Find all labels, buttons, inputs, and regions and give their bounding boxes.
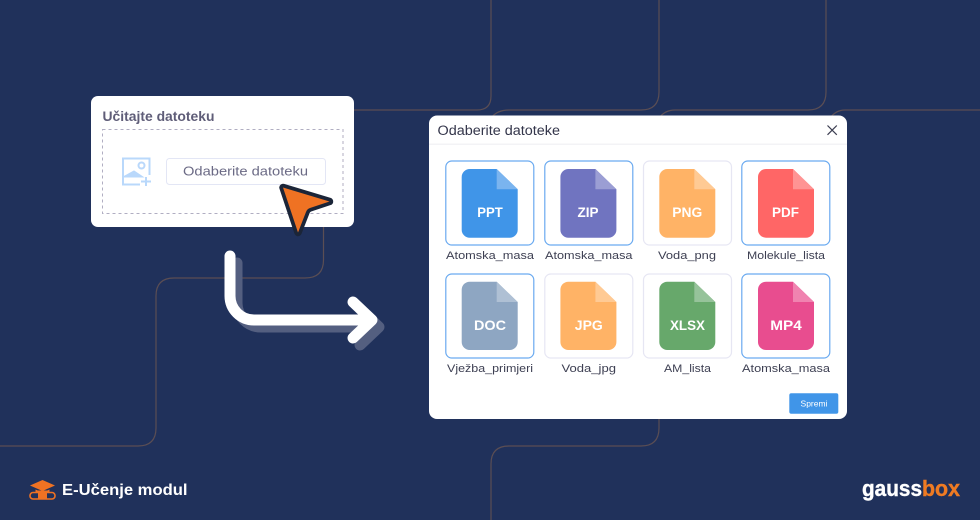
logo: gaussbox: box (922, 476, 961, 501)
file tile: ZIP: Atomska_masa (545, 250, 634, 262)
file tile: PPT: Atomska_masa (446, 250, 535, 262)
file tile: ZIP (545, 161, 634, 262)
icon: close (828, 126, 837, 135)
file tile: MP4: MP4 (770, 318, 802, 333)
panel: upload card (91, 96, 354, 227)
file tile: PPT: PPT (477, 205, 504, 220)
arrow: flow to file dialog (230, 256, 379, 345)
brand: E-Učenje modul: E-Učenje modul (62, 482, 188, 499)
heading: dialog title: Odaberite datoteke (438, 123, 560, 138)
heading: upload card title: Učitajte datoteku (102, 109, 214, 124)
file tile: MP4 (742, 274, 831, 375)
button: choose file: Odaberite datoteku (183, 164, 308, 178)
file tile: JPG: Voda_jpg (562, 363, 616, 375)
dashed drop zone (102, 130, 343, 214)
file tile: PDF: Molekule_lista (747, 250, 826, 262)
file tile: DOC: DOC (474, 318, 506, 333)
file tile: JPG: JPG (575, 318, 603, 333)
file tile: JPG (545, 274, 633, 375)
panel: file picker dialog (429, 116, 847, 419)
file tile: XLSX: XLSX (670, 318, 705, 333)
button: save (789, 393, 838, 414)
file tile: PNG: PNG (672, 205, 702, 220)
icon: add image (123, 158, 151, 186)
file tile: PDF (742, 161, 830, 262)
logo: gaussbox (862, 476, 961, 501)
icon: orange cursor (283, 188, 330, 232)
file tile: XLSX (644, 274, 732, 375)
brand: E-Učenje modul (30, 480, 188, 499)
file tile: MP4: Atomska_masa (742, 363, 831, 375)
file tile: DOC (446, 274, 534, 375)
file tile: XLSX: AM_lista (664, 363, 712, 375)
button: choose file (166, 158, 326, 184)
file tile: ZIP: ZIP (578, 205, 598, 220)
button: save: Spremi (801, 398, 828, 408)
file tile: DOC: Vježba_primjeri (447, 363, 533, 375)
file tile: PPT (446, 161, 535, 262)
file tile: PNG (644, 161, 732, 262)
file tile: PDF: PDF (772, 205, 799, 220)
file tile: PNG: Voda_png (658, 250, 716, 262)
logo: gaussbox: gauss (862, 476, 922, 501)
icon: graduation cap (30, 480, 55, 499)
